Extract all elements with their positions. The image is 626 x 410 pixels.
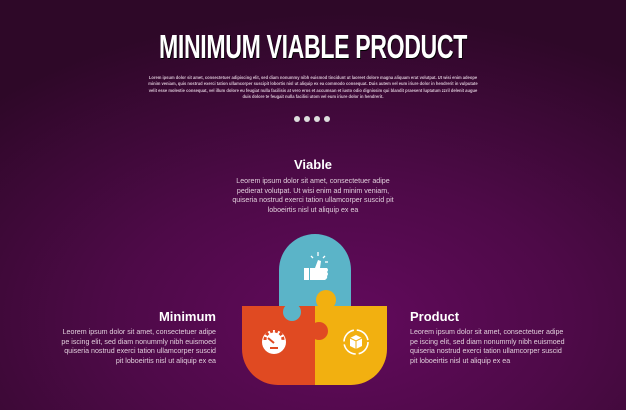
block: Product: [410, 309, 565, 365]
icon: gauge: [262, 330, 286, 354]
knob: red into yellow: [310, 322, 328, 340]
block: Product: Leorem ipsum dolor sit amet, consectetuer adipe pe iscing elit, sed diam nonummly nibh euismoed quiseria nostrud exerci tation ullamcorper suscid pit loboeirtis nisl ut aliquip ex ea: [410, 328, 565, 365]
piece: yellow product: [315, 306, 387, 385]
piece: red minimum: [242, 306, 315, 385]
block: Viable: Leorem ipsum dolor sit amet, consectetuer adipe pedierat volutpat. Ut wisi enim ad minim veniam, quiseria nostrud exerci tation ullamcorper suscid pit loboeirtis nisl ut aliquip ex ea: [232, 177, 394, 214]
block: Viable: [232, 157, 394, 214]
block: Product: Product: [410, 309, 459, 324]
piece: blue viable: [279, 234, 351, 306]
block: Minimum: Minimum: [159, 309, 216, 324]
icon: box cycle: [344, 330, 368, 354]
block: Minimum: Leorem ipsum dolor sit amet, consectetuer adipe pe iscing elit, sed diam nonummly nibh euismoed quiseria nostrud exerci tation ullamcorper suscid pit loboeirtis nisl ut aliquip ex ea: [61, 328, 216, 365]
knob: blue into red: [283, 303, 301, 321]
block: Minimum: [61, 309, 216, 365]
dots: [294, 116, 330, 122]
icon: thumbs up: [304, 252, 328, 280]
title: MINIMUM VIABLE PRODUCT: [159, 28, 467, 65]
block: Viable: Viable: [294, 157, 332, 172]
subtitle text: Lorem ipsum dolor sit amet, consectetuer adipiscing elit, sed diam nonummy nibh euismod tincidunt ut laoreet dolore magna aliquam erat volutpat. Ut wisi enim adeope minim veniam, quis nostrud exerci tation ullamcorper suscipit lobortis nisl ut aliquip ex ea commodo consequat. Duis autem vel eum iriure dolor in hendrerit in vulputate velit esse molestie consequat, vel illum dolore eu feugiat nulla facilisis at vero eros et accumsan et iusto odio dignissim qui blandit praesent luptatum zzril delenit augue duis dolore te feugait nulla facilisi utom vel eum iriure dolor in hendrerit.: [148, 75, 478, 99]
knob: yellow into blue: [316, 290, 336, 310]
puzzle graphic: [242, 234, 387, 385]
